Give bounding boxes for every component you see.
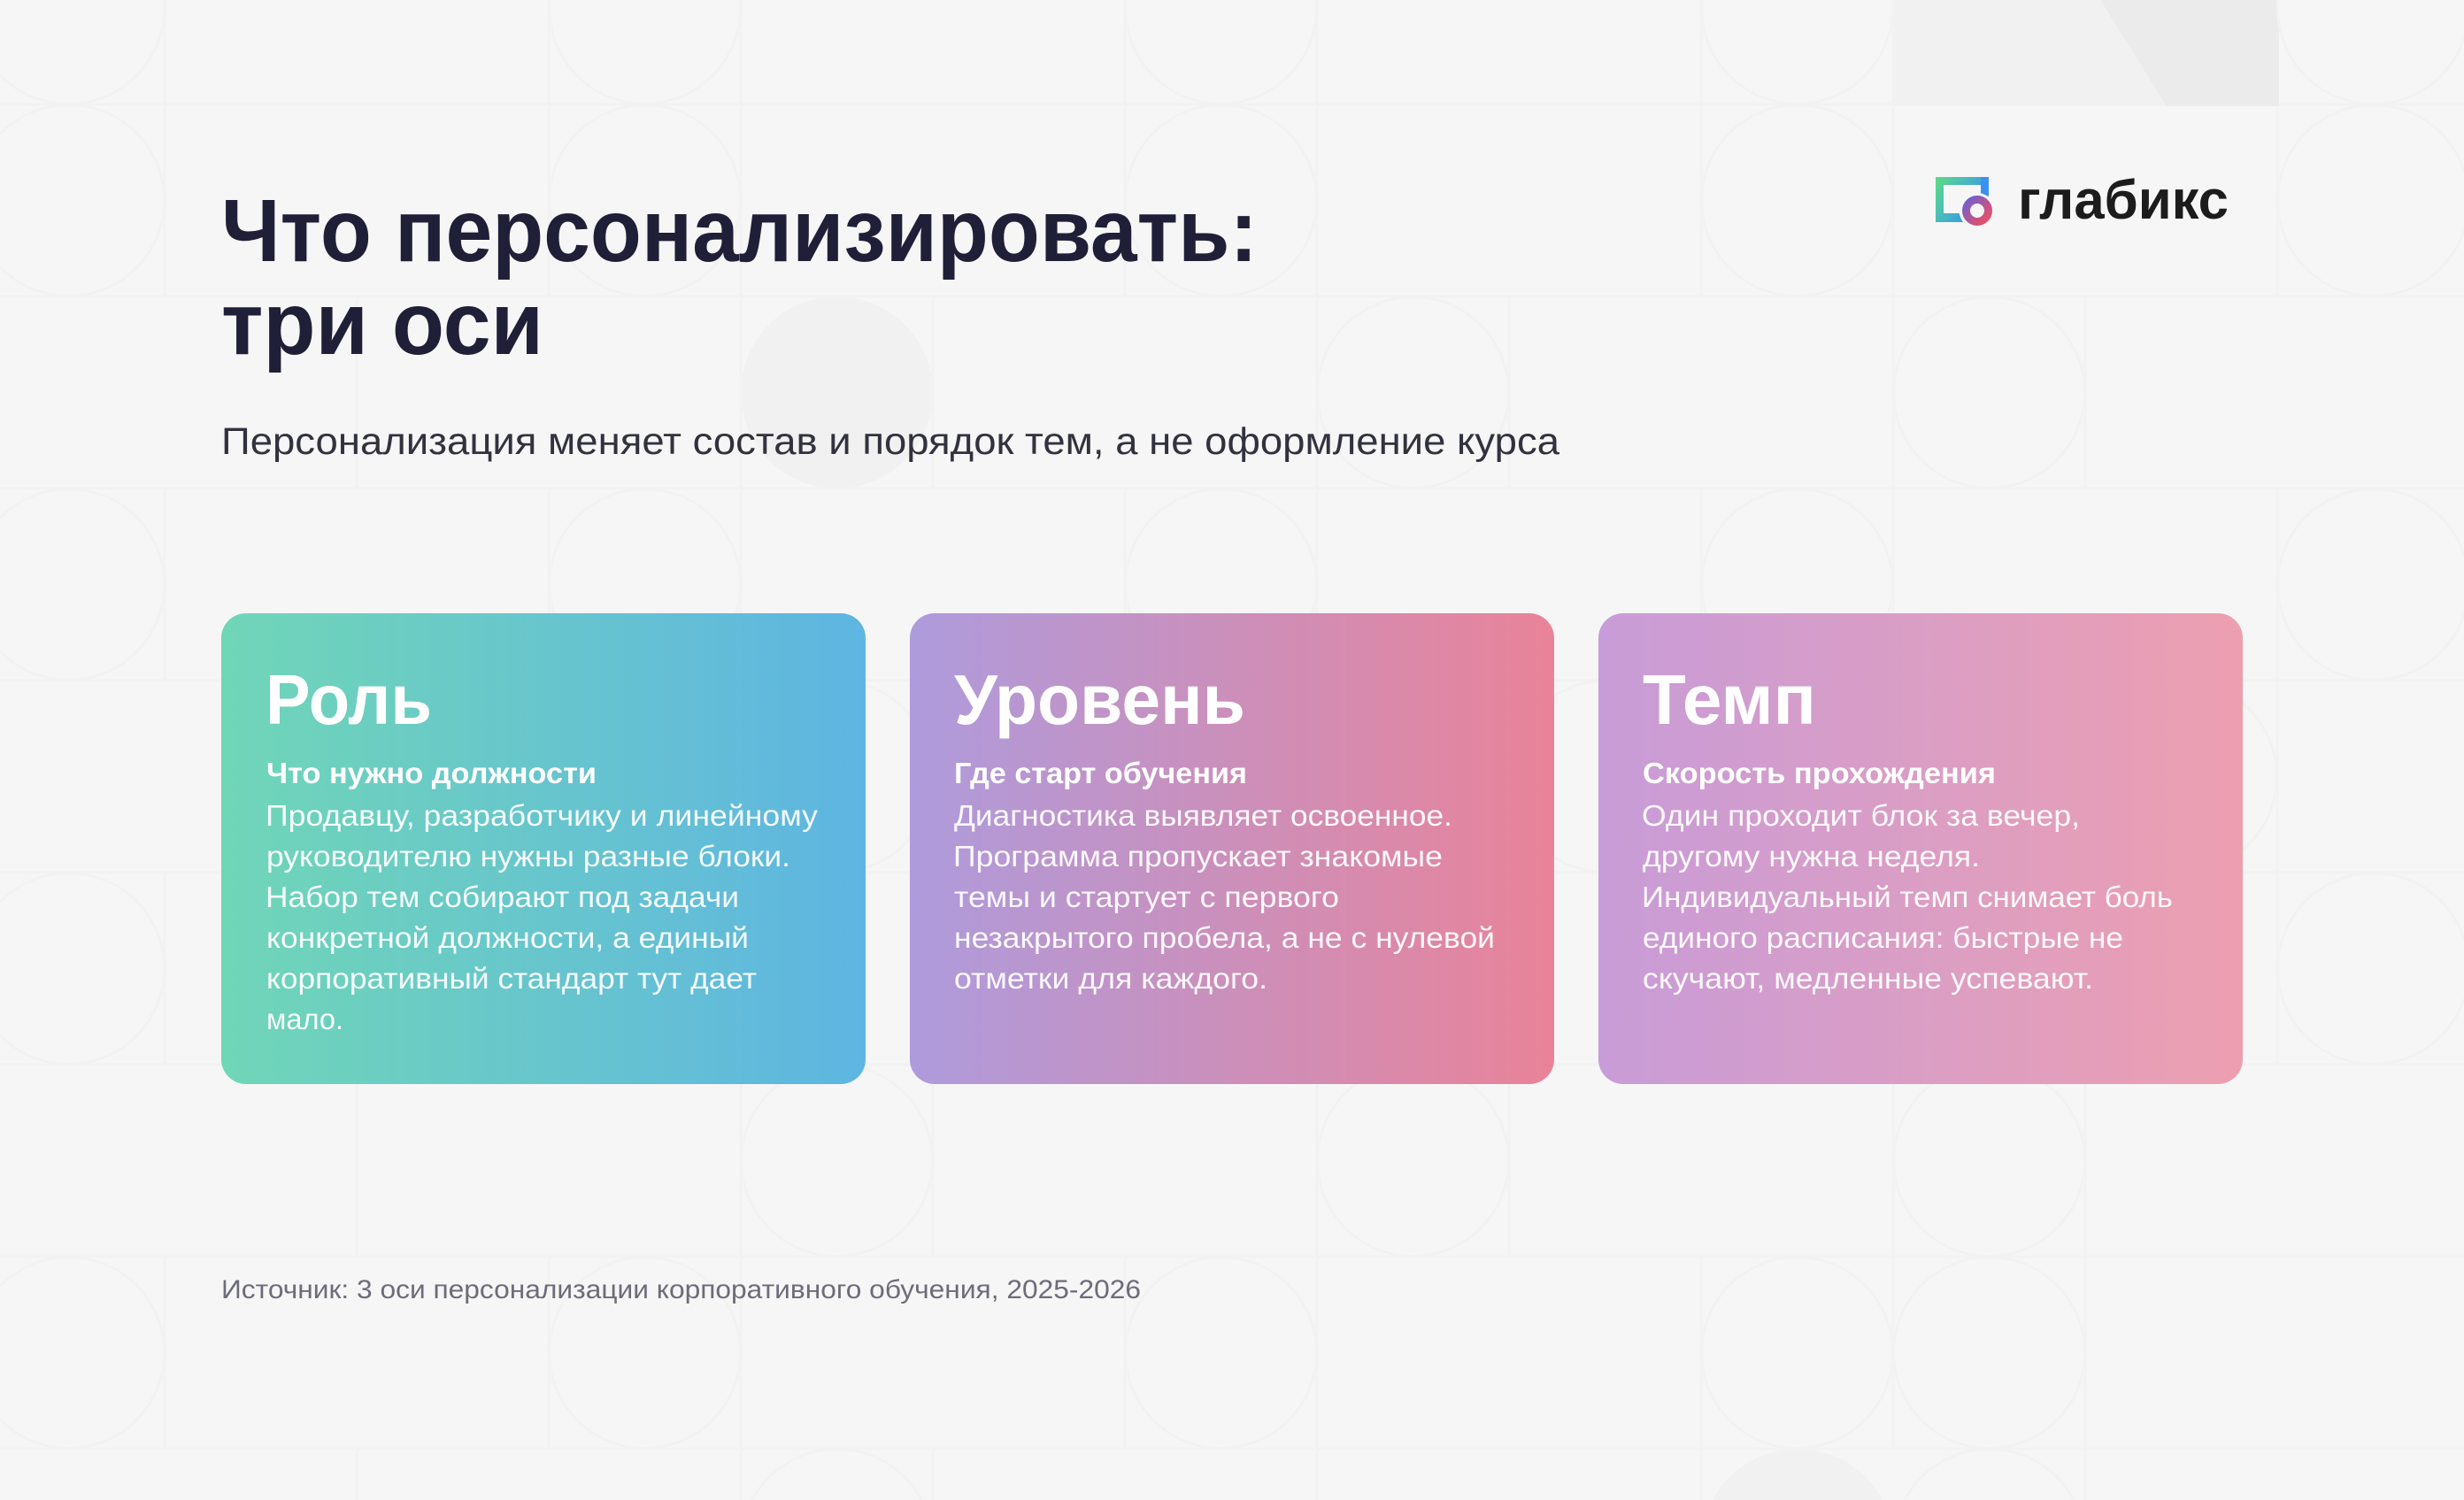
panel: Темп <box>1598 613 2243 1084</box>
source note: Источник: 3 оси персонализации корпоративного обучения, 2025-2026 <box>221 1275 1141 1304</box>
body text: конкретной должности, а единый <box>266 921 749 954</box>
body text: единого расписания: быстрые не <box>1643 921 2123 954</box>
body text: Продавцу, разработчику и линейному <box>266 799 819 832</box>
body text: незакрытого пробела, а не с нулевой <box>954 921 1495 954</box>
heading: Роль: Роль <box>266 660 432 739</box>
body text: Диагностика выявляет освоенное. <box>954 799 1452 832</box>
body text: мало. <box>266 1003 343 1035</box>
body text: руководителю нужны разные блоки. <box>266 840 790 873</box>
body text: Программа пропускает знакомые <box>953 840 1443 873</box>
title: Что персонализировать: <box>221 181 1258 281</box>
title <box>221 181 1258 373</box>
subheading: Что нужно должности: Что нужно должности <box>266 757 597 789</box>
body text: Индивидуальный темп снимает боль <box>1642 881 2173 913</box>
panel: Уровень <box>910 613 1554 1084</box>
icon: logo mark <box>1936 177 1995 228</box>
body text: темы и стартует с первого <box>954 881 1339 913</box>
logo wordmark: глабикс <box>2018 170 2229 231</box>
panel: Роль <box>221 613 866 1084</box>
logo <box>1936 170 2229 231</box>
heading: Уровень: Уровень <box>954 660 1245 739</box>
subheading: Где старт обучения: Где старт обучения <box>954 757 1247 789</box>
subheading: Скорость прохождения: Скорость прохождения <box>1643 757 1996 789</box>
body text: скучают, медленные успевают. <box>1643 962 2093 995</box>
body text: другому нужна неделя. <box>1643 840 1980 873</box>
body text <box>1642 799 2173 995</box>
body text: отметки для каждого. <box>954 962 1267 995</box>
subtitle: Персонализация меняет состав и порядок тем, а не оформление курса <box>221 420 1559 463</box>
body text: Набор тем собирают под задачи <box>266 881 739 913</box>
title: три оси <box>221 274 543 373</box>
body text <box>953 799 1495 995</box>
body text: корпоративный стандарт тут дает <box>266 962 757 995</box>
heading: Темп: Темп <box>1643 660 1816 739</box>
body text <box>266 799 819 1035</box>
body text: Один проходит блок за вечер, <box>1642 799 2080 832</box>
